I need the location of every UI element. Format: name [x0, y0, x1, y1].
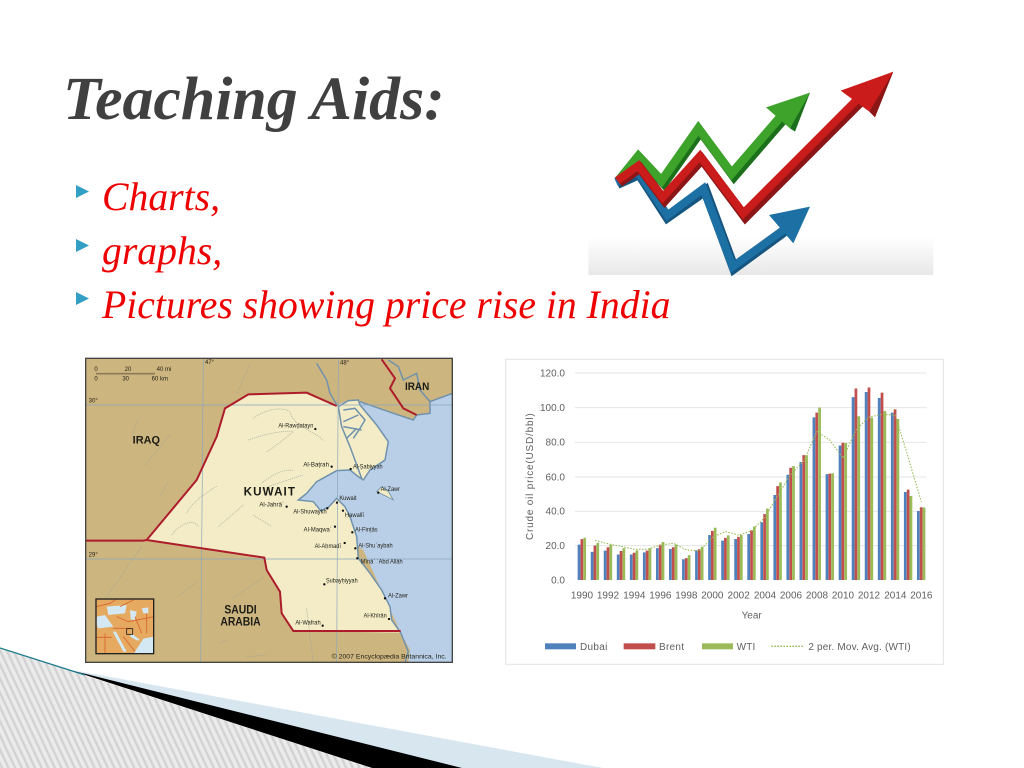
- international borders: [86, 359, 417, 631]
- island: [377, 487, 393, 500]
- moving average line: [595, 414, 921, 551]
- year axis labels: 1998: [675, 591, 698, 602]
- legend: WTI: [737, 642, 755, 653]
- Kuwait territory: [147, 393, 401, 633]
- scale bar: 40 mi: [157, 367, 171, 373]
- place labels: Al-Baṭrah: [303, 463, 329, 469]
- value axis labels: 20.0: [546, 541, 565, 552]
- place labels: Mīnāʾ ʿAbd Allāh: [361, 559, 403, 566]
- legend: [545, 642, 911, 653]
- sea: [293, 393, 452, 662]
- year axis labels: [571, 591, 933, 602]
- country labels: IRAN: [405, 381, 429, 393]
- scale bar: 20: [125, 367, 132, 373]
- year axis labels: 2002: [728, 591, 750, 602]
- dashed wadis: [107, 365, 323, 662]
- year axis labels: 1992: [597, 591, 620, 602]
- place labels: Al-Zawr: [388, 593, 408, 599]
- blue arrow: [616, 172, 810, 268]
- place labels: [259, 423, 447, 660]
- coordinates: 30°: [89, 398, 98, 404]
- scale bar: 30: [122, 376, 130, 382]
- decorative corner swoosh: [0, 648, 603, 768]
- place labels: Kuwait: [339, 496, 357, 502]
- place labels: Al-Ṣabiyyah: [353, 464, 383, 470]
- Dubai bars: [578, 392, 920, 580]
- year axis title: Year: [742, 610, 762, 621]
- coast and river channels: [298, 360, 452, 662]
- place labels: Al-Aḥmadī: [315, 544, 341, 550]
- place labels: Al-Maqwaʿ: [304, 527, 332, 534]
- year axis labels: 2004: [754, 591, 777, 602]
- year axis labels: 2012: [858, 591, 881, 602]
- coordinates: 48°: [340, 360, 350, 366]
- map frame: [86, 358, 452, 662]
- scale bar: 0: [94, 367, 98, 373]
- place labels: © 2007 Encyclopædia Britannica, Inc.: [332, 653, 447, 660]
- country labels: [133, 381, 429, 628]
- year axis labels: 2006: [780, 591, 803, 602]
- value axis labels: 0.0: [551, 575, 565, 586]
- year axis labels: 2016: [910, 591, 933, 602]
- grid lines: [86, 358, 452, 662]
- country labels: SAUDI: [224, 603, 257, 616]
- legend: 2 per. Mov. Avg. (WTI): [808, 642, 911, 653]
- green arrow: [618, 93, 810, 184]
- place labels: Al-Shuwaykh: [293, 510, 327, 516]
- place labels: Al-Wafrah: [295, 620, 321, 626]
- crude oil price chart: [506, 359, 943, 664]
- map of Kuwait: [86, 358, 452, 662]
- year axis labels: 2000: [701, 591, 724, 602]
- red arrow: [617, 72, 893, 217]
- bullet list: [76, 175, 670, 327]
- legend: Dubai: [580, 642, 607, 653]
- bullet: graphs: graphs,: [102, 229, 222, 273]
- value axis labels: 120.0: [540, 368, 565, 379]
- bullet: pictures: Pictures showing price rise in India: [101, 283, 670, 327]
- picture: rising arrows: [588, 72, 933, 275]
- country labels: IRAQ: [133, 434, 160, 446]
- coordinates: [89, 360, 350, 559]
- place labels: Ṣubayḥiyyah: [326, 578, 358, 584]
- value axis labels: [540, 368, 565, 586]
- inset locator map: [96, 599, 154, 654]
- ground shadow: [588, 237, 933, 275]
- legend: Brent: [659, 642, 684, 653]
- place labels: Al-Finṭās: [355, 528, 378, 534]
- year axis labels: 2008: [806, 591, 829, 602]
- place labels: Al-Shuʿaybah: [358, 542, 393, 549]
- gridlines: [575, 373, 927, 546]
- year axis labels: 1994: [623, 591, 646, 602]
- year axis labels: 1990: [571, 591, 594, 602]
- place labels: Al-Jahrāʾ: [259, 501, 284, 508]
- scale bar: [94, 367, 171, 382]
- place labels: Al-Rawḍatayn: [278, 423, 313, 429]
- value axis title: Crude oil price(USD/bbl): [525, 413, 536, 540]
- chart panel: [506, 359, 943, 664]
- value axis labels: 80.0: [546, 438, 565, 449]
- title: Teaching Aids:: [63, 65, 445, 133]
- scale bar: 0: [94, 376, 98, 382]
- coordinates: 29°: [89, 553, 98, 559]
- city dots: [287, 429, 389, 626]
- place labels: Al-Khīrān: [364, 613, 387, 619]
- scale bar: 60 km: [152, 376, 168, 382]
- map land background: [86, 358, 452, 662]
- WTI bars: [583, 407, 925, 580]
- place labels: Ḥawallī: [345, 513, 364, 519]
- coordinates: 47°: [205, 360, 215, 366]
- country labels: ARABIA: [220, 615, 261, 628]
- year axis labels: 2010: [832, 591, 855, 602]
- year axis labels: 2014: [884, 591, 907, 602]
- Brent bars: [580, 387, 923, 580]
- year axis labels: 1996: [649, 591, 672, 602]
- country labels: KUWAIT: [244, 486, 295, 499]
- place labels: Al-Zawr: [381, 487, 400, 493]
- value axis labels: 60.0: [546, 472, 565, 483]
- value axis labels: 40.0: [546, 507, 565, 518]
- bullet: Charts: Charts,: [102, 175, 220, 219]
- value axis labels: 100.0: [540, 403, 565, 414]
